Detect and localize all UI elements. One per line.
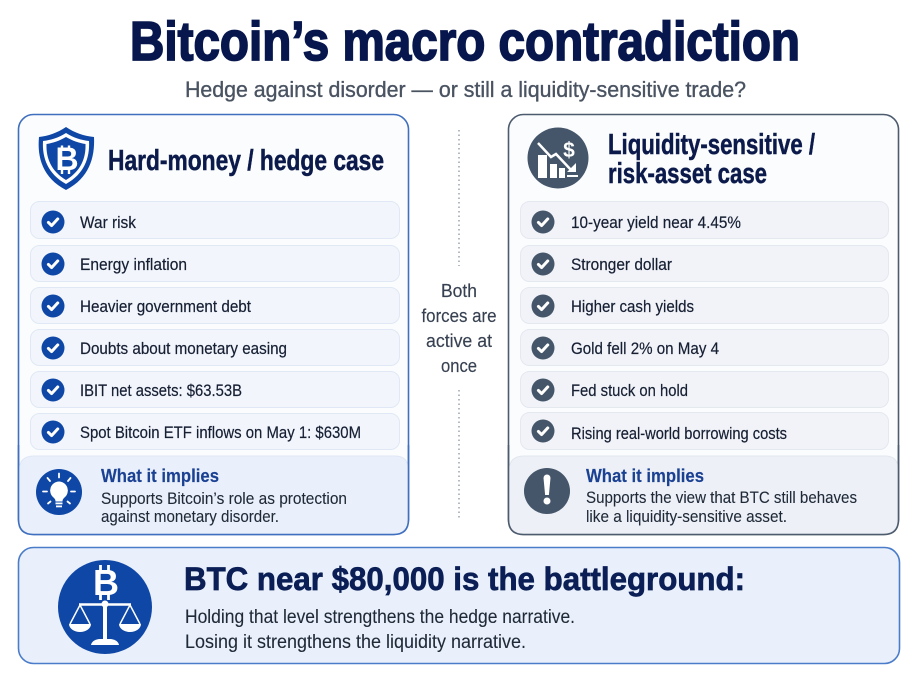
callout: what it implies (liquidity): What it implies bbox=[586, 466, 704, 486]
text: holding level: Holding that level strengthens the hedge narrative. bbox=[185, 607, 575, 628]
center note: both forces active: forces are bbox=[422, 306, 496, 326]
list item: monetary easing bbox=[30, 330, 400, 366]
list item: 10-year yield: 10-year yield near 4.45% bbox=[571, 213, 741, 232]
list item: war risk: War risk bbox=[80, 213, 136, 232]
list item: cash yields: Higher cash yields bbox=[571, 297, 694, 316]
panel: battleground summary bbox=[18, 548, 900, 664]
callout: what it implies (hedge): against monetary disorder. bbox=[101, 508, 279, 526]
callout: what it implies (hedge): Supports Bitcoin’s role as protection bbox=[101, 490, 347, 508]
list item: IBIT net assets: IBIT net assets: $63.53B bbox=[80, 381, 242, 400]
list item: IBIT net assets bbox=[30, 372, 400, 408]
list item: fed on hold bbox=[520, 372, 888, 408]
callout: what it implies (hedge) bbox=[18, 445, 408, 534]
subtitle: Hedge against disorder — or still a liquidity-sensitive trade? bbox=[185, 77, 746, 102]
center note: both forces active: once bbox=[441, 356, 477, 376]
center note: both forces active: active at bbox=[426, 331, 492, 351]
callout: what it implies (liquidity) bbox=[508, 445, 898, 534]
callout: what it implies (liquidity): Supports the view that BTC still behaves bbox=[586, 489, 857, 507]
heading: hard-money: Hard-money / hedge case bbox=[108, 145, 384, 177]
icon: bitcoin scales bbox=[58, 560, 152, 654]
callout: what it implies (hedge): What it implies bbox=[101, 466, 219, 486]
heading: liquidity-sensitive: Liquidity-sensitive / bbox=[608, 129, 815, 161]
list item: energy inflation: Energy inflation bbox=[80, 255, 187, 274]
panel: liquidity-sensitive case bbox=[508, 114, 898, 534]
center note: both forces active bbox=[422, 130, 496, 520]
list item: ETF inflows bbox=[30, 414, 400, 450]
list item: government debt: Heavier government debt bbox=[80, 297, 251, 316]
list item: borrowing costs bbox=[520, 412, 888, 450]
icon: exclamation bbox=[524, 468, 570, 514]
icon: bitcoin shield: B bbox=[55, 141, 79, 177]
panel: hard-money hedge case bbox=[18, 114, 408, 534]
list item: gold fell: Gold fell 2% on May 4 bbox=[571, 339, 719, 358]
heading: liquidity-sensitive: risk-asset case bbox=[608, 158, 767, 190]
list item: stronger dollar: Stronger dollar bbox=[571, 255, 672, 274]
heading: liquidity-sensitive bbox=[608, 129, 815, 190]
list item: war risk bbox=[30, 202, 400, 238]
title: Bitcoin’s macro contradiction bbox=[130, 10, 800, 72]
list item: gold fell bbox=[520, 330, 888, 366]
list item: fed on hold: Fed stuck on hold bbox=[571, 381, 688, 400]
list item: borrowing costs: Rising real-world borrowing costs bbox=[571, 424, 787, 443]
icon: bitcoin shield bbox=[39, 127, 94, 190]
list item: ETF inflows: Spot Bitcoin ETF inflows on May 1: $630M bbox=[80, 423, 361, 442]
icon: bitcoin scales: B bbox=[93, 562, 119, 603]
list item: 10-year yield bbox=[520, 202, 888, 238]
icon: light bulb bbox=[36, 469, 82, 515]
text: losing level: Losing it strengthens the liquidity narrative. bbox=[185, 632, 526, 653]
icon: falling chart with dollar bbox=[528, 128, 588, 188]
center note: both forces active: Both bbox=[441, 281, 477, 301]
list item: energy inflation bbox=[30, 246, 400, 282]
heading: battleground: BTC near $80,000 is the battleground: bbox=[184, 561, 745, 597]
list item: stronger dollar bbox=[520, 246, 888, 282]
list item: government debt bbox=[30, 288, 400, 324]
callout: what it implies (liquidity): like a liquidity-sensitive asset. bbox=[586, 508, 787, 526]
list item: cash yields bbox=[520, 288, 888, 324]
icon: falling chart with dollar: $ bbox=[563, 139, 575, 162]
list item: monetary easing: Doubts about monetary easing bbox=[80, 339, 287, 358]
